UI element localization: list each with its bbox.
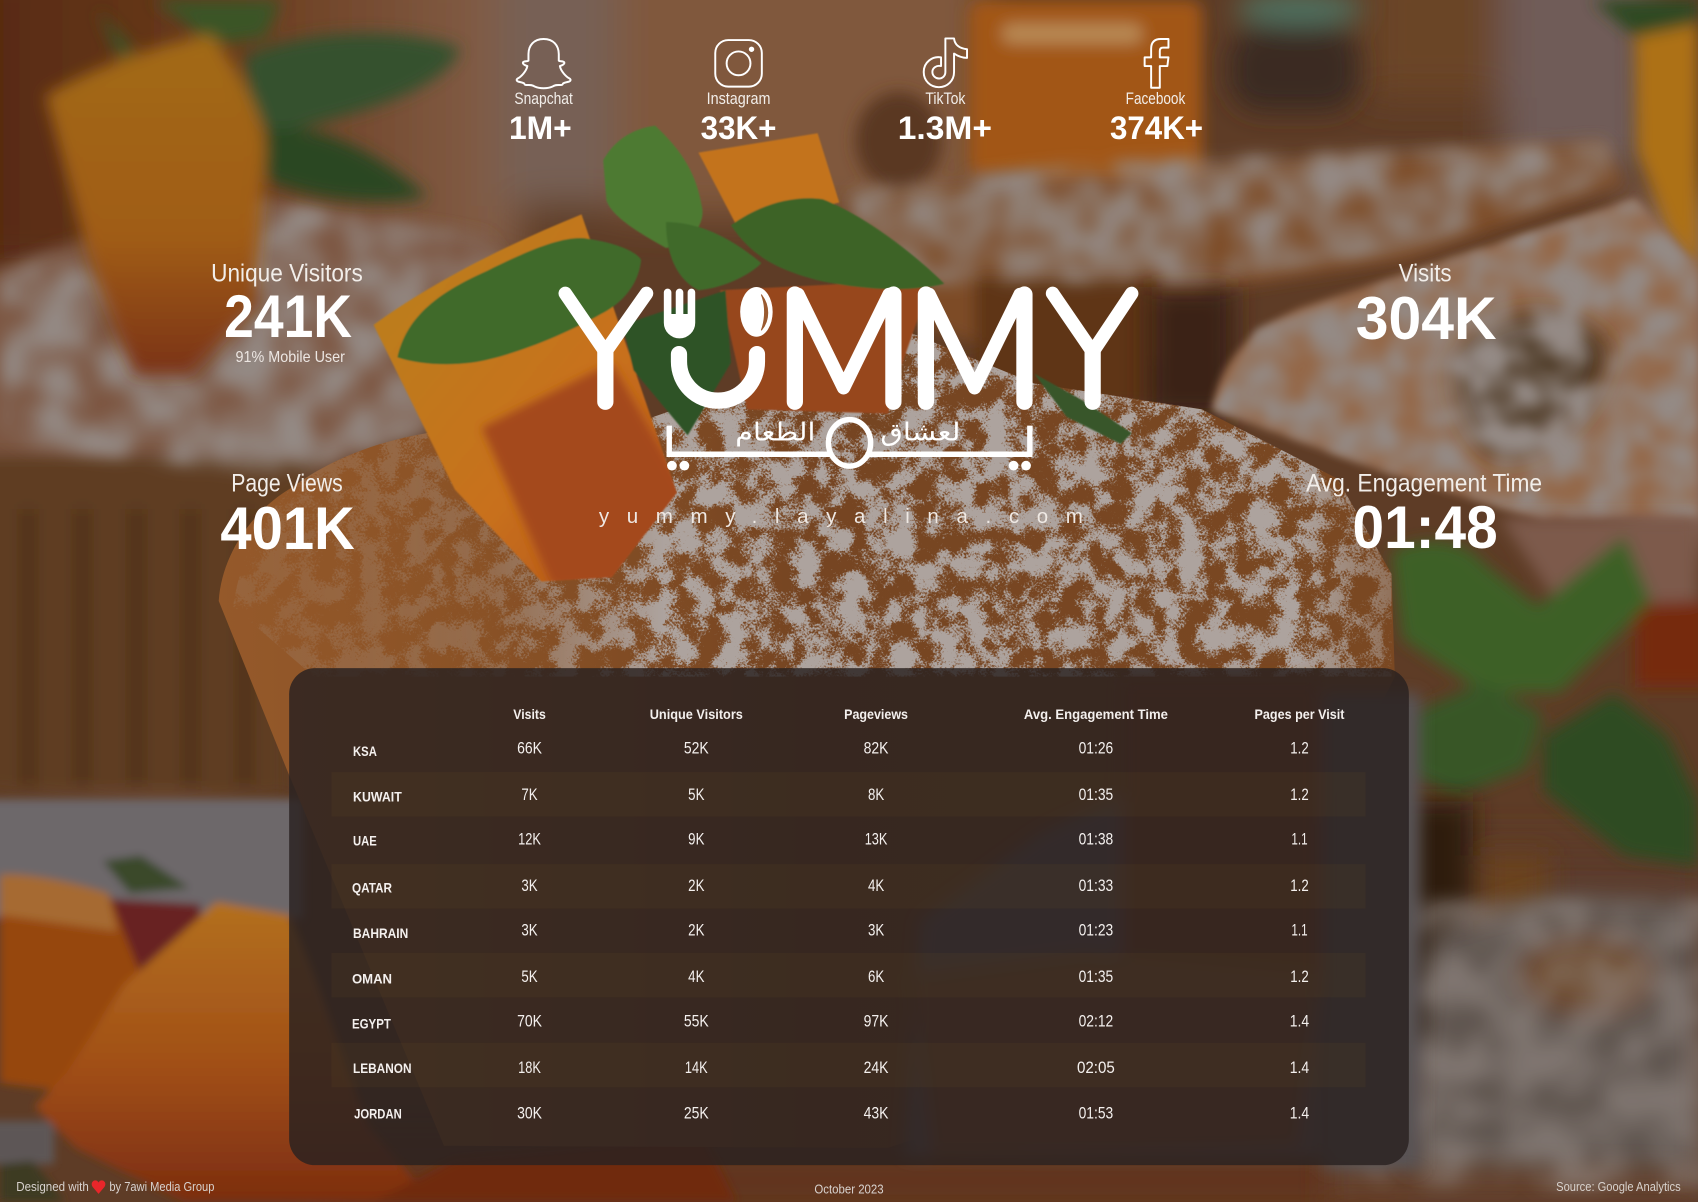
row Egypt: 55K — [684, 1013, 709, 1031]
right muffin — [1213, 199, 1698, 520]
stat: Unique Visitors: 91% Mobile User — [236, 349, 345, 366]
icon: tiktok note — [924, 38, 967, 87]
row Lebanon: 18K — [518, 1059, 541, 1077]
logo: Arabic wordmark: الطعام — [735, 418, 815, 447]
table header row: Avg. Engagement Time — [1024, 706, 1168, 722]
row Qatar: 1.2 — [1290, 877, 1309, 895]
stat: Avg. Engagement Time: Avg. Engagement Time — [1306, 470, 1542, 498]
row UAE: 9K — [688, 831, 705, 849]
icon: spoon — [740, 287, 773, 337]
row KSA: 66K — [517, 740, 542, 758]
stat: Avg. Engagement Time — [1306, 470, 1542, 561]
row Jordan: 30K — [517, 1105, 542, 1123]
social stat: Snapchat — [509, 39, 573, 146]
footer: date: October 2023 — [814, 1182, 884, 1196]
row Bahrain: 2K — [688, 922, 705, 940]
row Qatar: 2K — [688, 877, 705, 895]
table header row: Pageviews — [844, 706, 908, 722]
row Lebanon: 14K — [685, 1059, 708, 1077]
panel back shapes — [904, 678, 1421, 1170]
row UAE: 01:38 — [1079, 831, 1113, 849]
social stat: Instagram: 33K+ — [701, 110, 776, 146]
row Kuwait: 7K — [521, 786, 538, 804]
sharp center fruit and mint — [374, 126, 1132, 585]
row Oman: 01:35 — [1079, 968, 1113, 986]
row UAE: 12K — [518, 831, 541, 849]
footer: source: Source: Google Analytics — [1556, 1180, 1681, 1194]
icon: facebook f — [1145, 39, 1168, 88]
row UAE: 13K — [865, 831, 888, 849]
row Egypt: 1.4 — [1290, 1013, 1309, 1031]
row Lebanon: 24K — [864, 1059, 889, 1077]
row Lebanon: 02:05 — [1077, 1059, 1115, 1077]
row KSA: 52K — [684, 740, 709, 758]
row Kuwait: KUWAIT — [353, 788, 402, 804]
stat: Visits: 304K — [1356, 284, 1497, 352]
social stat: Facebook: 374K+ — [1110, 110, 1203, 146]
row Jordan: 43K — [864, 1105, 889, 1123]
row Kuwait: 8K — [868, 786, 884, 804]
row Oman — [331, 953, 1366, 997]
social stat: Instagram — [701, 40, 776, 146]
stat: Unique Visitors: Unique Visitors — [211, 260, 363, 288]
table header row: Unique Visitors — [650, 706, 743, 722]
stat: Unique Visitors — [211, 260, 363, 366]
table header row — [513, 706, 1345, 722]
social stat: Snapchat: Snapchat — [514, 90, 573, 108]
social stat: Facebook: Facebook — [1126, 90, 1186, 108]
icon: instagram — [715, 40, 762, 87]
row Qatar: 3K — [521, 877, 538, 895]
lower left fruit and table — [0, 799, 736, 1202]
row Qatar: 4K — [868, 877, 884, 895]
stat: Page Views: Page Views — [231, 470, 343, 498]
row Kuwait — [331, 772, 1366, 816]
row KSA: 01:26 — [1079, 740, 1113, 758]
row Qatar: QATAR — [352, 879, 392, 895]
row Egypt: 02:12 — [1079, 1013, 1113, 1031]
logo: Arabic wordmark: لعشاق — [880, 418, 961, 447]
table header row: Pages per Visit — [1255, 706, 1345, 722]
footer: credit: Designed with — [16, 1180, 89, 1194]
row KSA — [353, 740, 1309, 759]
row Bahrain — [353, 922, 1308, 941]
row KSA: 82K — [864, 740, 889, 758]
row Oman: 1.2 — [1290, 968, 1309, 986]
row Lebanon — [331, 1043, 1366, 1087]
row Egypt: 70K — [517, 1013, 542, 1031]
row Egypt: 97K — [864, 1013, 889, 1031]
row Lebanon: LEBANON — [353, 1060, 412, 1076]
row Qatar — [331, 864, 1366, 909]
stat: Avg. Engagement Time: 01:48 — [1353, 493, 1498, 561]
row Qatar: 01:33 — [1079, 877, 1113, 895]
stat: Page Views: 401K — [220, 494, 355, 562]
row Oman: 5K — [521, 968, 538, 986]
footer: credit: by 7awi Media Group — [109, 1180, 214, 1194]
social stat: Snapchat: 1M+ — [509, 110, 572, 146]
icon: snapchat ghost — [517, 39, 571, 88]
row UAE: 1.1 — [1291, 831, 1308, 849]
blurred top-left fruit and leaves — [45, 0, 460, 375]
row Jordan: JORDAN — [354, 1106, 402, 1122]
row Bahrain: BAHRAIN — [353, 925, 408, 941]
logo: YUMMY — [565, 287, 1132, 402]
row Bahrain: 3K — [868, 922, 884, 940]
footer: credit — [16, 1180, 214, 1194]
website url: yummy.layalina.com — [599, 505, 1083, 528]
stat: Visits: Visits — [1399, 260, 1452, 288]
row Jordan: 1.4 — [1290, 1105, 1309, 1123]
row Bahrain: 3K — [521, 922, 538, 940]
icon: fork — [664, 289, 695, 338]
social stat: Facebook — [1110, 39, 1203, 146]
row Kuwait: 5K — [688, 786, 705, 804]
stat: Page Views — [220, 470, 355, 562]
social stat: TikTok: TikTok — [925, 90, 966, 108]
stat: Unique Visitors: 241K — [224, 282, 352, 350]
row Lebanon: 1.4 — [1290, 1059, 1309, 1077]
row Jordan: 01:53 — [1079, 1105, 1113, 1123]
central muffin — [211, 314, 1402, 1148]
right leaves — [1392, 518, 1698, 866]
row Bahrain: 1.1 — [1291, 922, 1308, 940]
row Egypt — [352, 1013, 1309, 1032]
row KSA: KSA — [353, 743, 377, 759]
row Jordan: 25K — [684, 1105, 709, 1123]
row Kuwait: 1.2 — [1290, 786, 1309, 804]
table header row: Visits — [513, 706, 546, 722]
social stat: TikTok: 1.3M+ — [898, 110, 992, 146]
icon: heart — [92, 1180, 105, 1194]
social stat: TikTok — [898, 38, 992, 146]
back muffin — [850, 0, 1698, 406]
social stat: Instagram: Instagram — [707, 90, 770, 108]
row Egypt: EGYPT — [352, 1016, 391, 1032]
row Kuwait: 01:35 — [1079, 786, 1113, 804]
row Oman: 6K — [868, 968, 884, 986]
row UAE: UAE — [353, 833, 377, 849]
left muffin — [0, 199, 541, 799]
row Jordan — [354, 1105, 1309, 1123]
logo: Arabic wordmark — [667, 418, 1031, 471]
row UAE — [353, 831, 1308, 849]
table panel — [289, 668, 1409, 1165]
row KSA: 1.2 — [1290, 740, 1309, 758]
row Oman: 4K — [688, 968, 705, 986]
row Oman: OMAN — [352, 970, 392, 986]
row Bahrain: 01:23 — [1079, 922, 1113, 940]
